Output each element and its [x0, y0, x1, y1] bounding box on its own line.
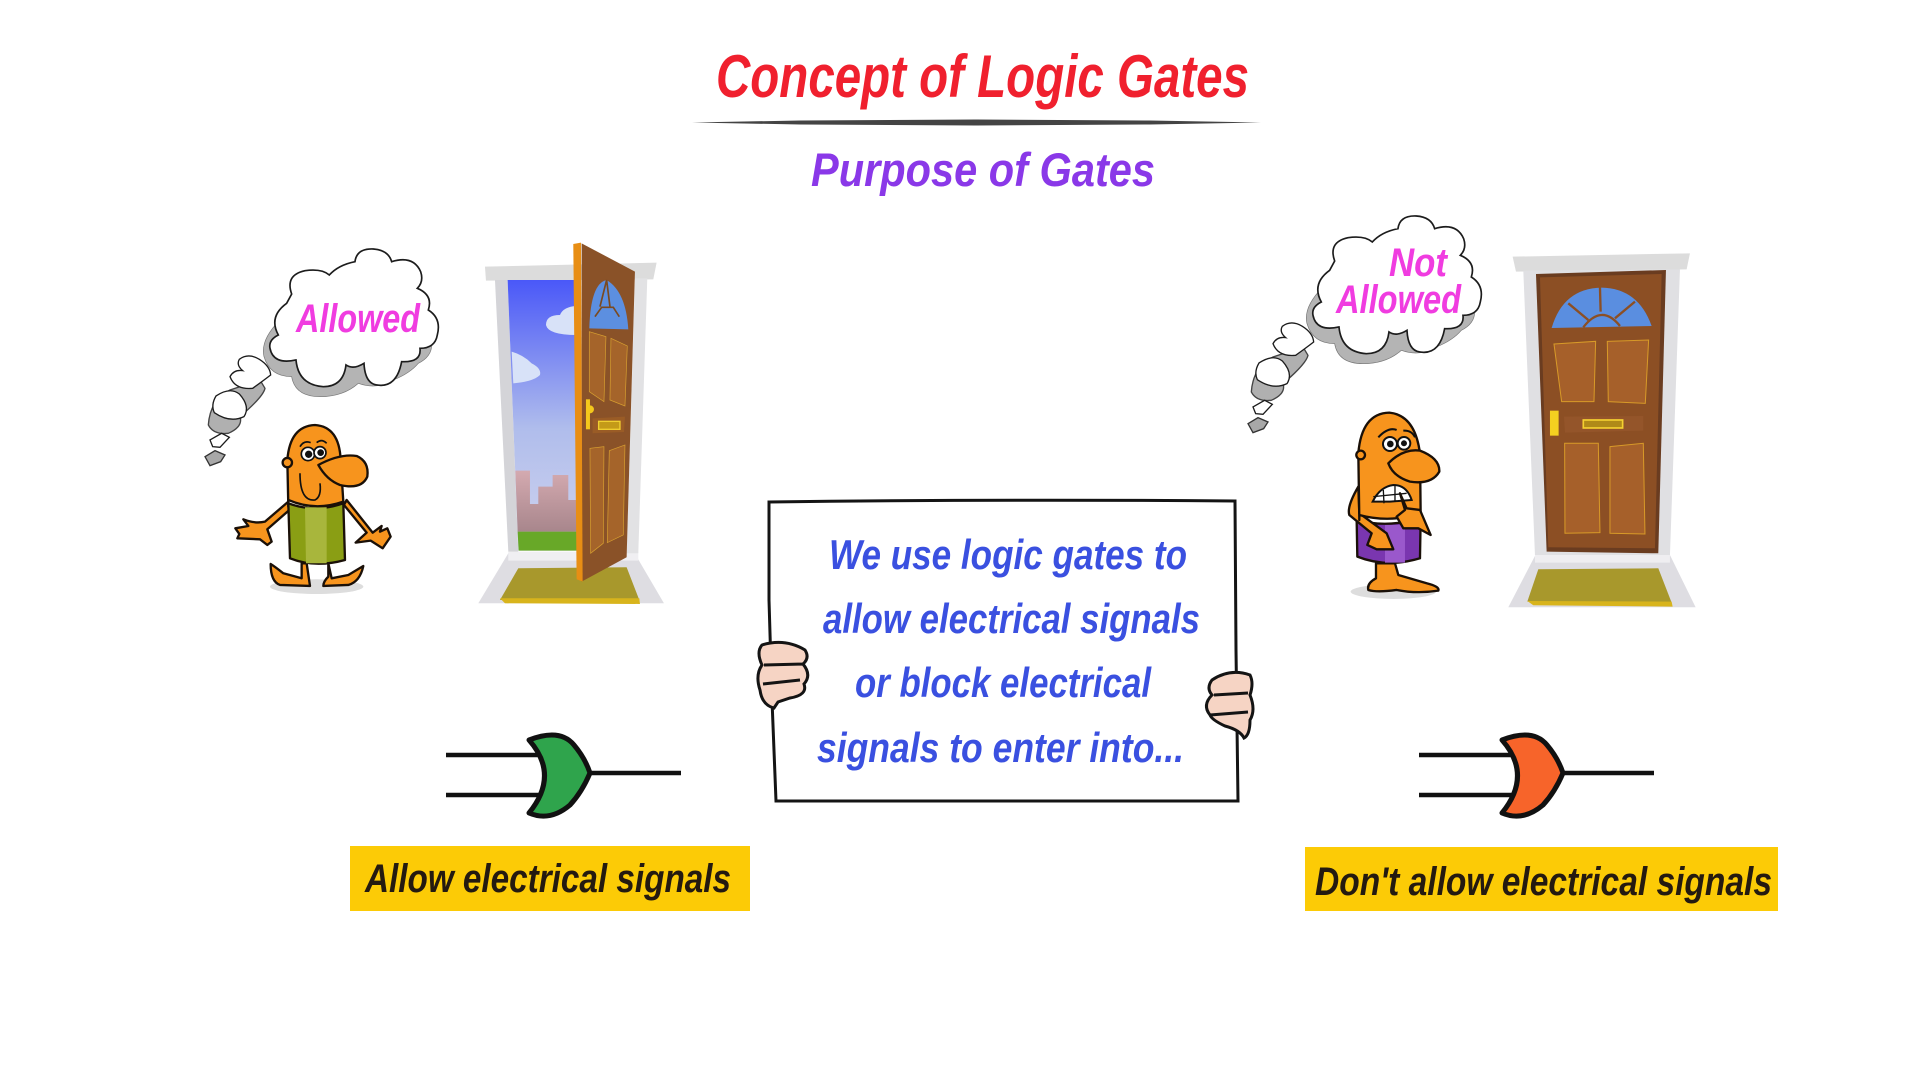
panel: message sign [758, 500, 1253, 801]
thought bubble: not allowed [1248, 216, 1481, 433]
character: happy person [235, 425, 391, 594]
character: worried person [1349, 413, 1439, 599]
title: Concept of Logic Gates [716, 43, 1249, 110]
sign text: or block electrical [855, 659, 1152, 706]
label: don't allow electrical signals [1305, 847, 1778, 911]
panel: not allowed scene [1248, 216, 1696, 607]
sign text [817, 531, 1200, 771]
subtitle: Purpose of Gates [811, 143, 1155, 196]
logic gate: orange (block) [1419, 735, 1654, 816]
door: closed [1508, 253, 1696, 607]
label: don't allow electrical signals: Don't allow electrical signals [1315, 860, 1772, 904]
panel: allowed scene [205, 243, 664, 604]
label: allow electrical signals [350, 846, 750, 911]
icon: right hand [1206, 672, 1253, 738]
logic gate: green (allow) [446, 735, 681, 816]
thought bubble: not allowed: Allowed [1335, 278, 1462, 322]
icon: left hand [758, 642, 808, 708]
thought bubble: allowed: Allowed [295, 297, 421, 341]
title divider [692, 120, 1261, 126]
sign board [769, 500, 1238, 801]
sign text: We use logic gates to [829, 531, 1187, 578]
thought bubble: allowed [205, 249, 438, 466]
thought bubble: not allowed: Not [1389, 241, 1448, 285]
label: allow electrical signals: Allow electrical signals [364, 857, 731, 901]
sign text: allow electrical signals [823, 595, 1200, 642]
sign text: signals to enter into... [817, 724, 1184, 771]
door: open [478, 243, 664, 604]
